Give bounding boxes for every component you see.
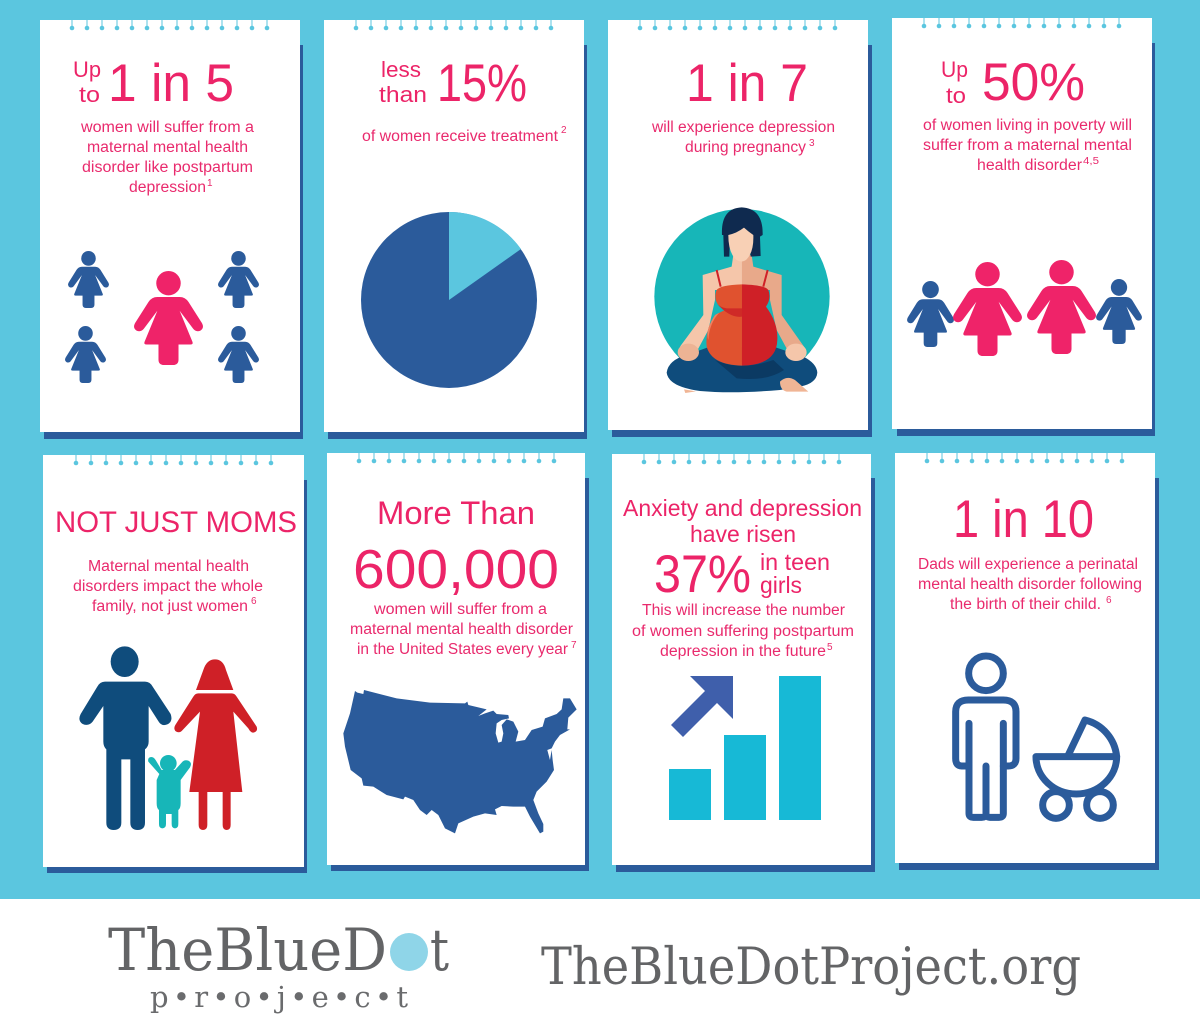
text: will experience depression bbox=[651, 119, 835, 156]
heading: less than 15%: 15% bbox=[437, 54, 527, 113]
text: women living in poverty: 4,5 bbox=[1083, 156, 1099, 167]
heading: up to 1 in 5: to bbox=[79, 82, 100, 107]
panel: more than 600,000 bbox=[327, 453, 589, 871]
panel: 1 in 7 bbox=[608, 20, 872, 437]
panel: not just moms bbox=[43, 455, 307, 873]
text: dads perinatal disorder: 6 bbox=[1106, 595, 1112, 606]
text: impact the whole family: Maternal mental health bbox=[88, 558, 249, 575]
heading: up to 1 in 5: Up bbox=[73, 57, 101, 82]
text: women will suffer bbox=[80, 119, 254, 196]
text: women will suffer: disorder like postpartum bbox=[82, 159, 253, 176]
pie chart: 15 percent bbox=[361, 212, 537, 388]
heading: anxiety and depression: have risen bbox=[690, 521, 796, 547]
icon: five women, one highlighted bbox=[65, 251, 259, 383]
icon: rising arrow bbox=[671, 676, 733, 737]
logo: the blue dot project bbox=[108, 916, 449, 1014]
heading: 1 in 7: 1 in 7 bbox=[686, 54, 808, 113]
text: impact the whole family: family, not just women bbox=[92, 598, 248, 615]
logo: the blue dot project: TheBlueD bbox=[108, 916, 387, 984]
heading: less than 15% bbox=[379, 54, 527, 113]
text: dads perinatal disorder bbox=[918, 556, 1142, 613]
bar chart: rising bars bbox=[669, 676, 821, 820]
text: women will suffer: 1 bbox=[207, 178, 213, 189]
icon: father and stroller bbox=[956, 656, 1117, 818]
heading: less than 15%: than bbox=[379, 82, 427, 107]
text: impact the whole family: 6 bbox=[251, 596, 257, 607]
panel: less than 15% bbox=[324, 20, 587, 439]
heading: less than 15%: less bbox=[381, 57, 421, 82]
logo: the blue dot project: t bbox=[430, 916, 449, 984]
text: postpartum depression in the future: This will increase the number bbox=[642, 602, 845, 619]
heading: 1 in 10: 1 in 10 bbox=[953, 490, 1094, 549]
text: of women receive treatment: 2 bbox=[561, 125, 567, 136]
icon: map of the united states bbox=[343, 690, 577, 833]
heading: anxiety and depression: girls bbox=[760, 572, 802, 598]
text: of women receive treatment: of women receive treatment bbox=[362, 128, 559, 145]
text: dads perinatal disorder: the birth of their child. bbox=[950, 596, 1101, 613]
panel: 1 in 10 dads bbox=[895, 453, 1159, 870]
heading: more than 600,000 bbox=[353, 495, 559, 600]
text: will experience depression: 3 bbox=[809, 138, 815, 149]
text: women will suffer: women will suffer from a bbox=[80, 119, 254, 136]
text: women living in poverty: of women living in poverty will bbox=[923, 117, 1132, 134]
text: women living in poverty bbox=[923, 117, 1132, 174]
heading: up to 50%: to bbox=[946, 83, 966, 108]
heading: more than 600,000: More Than bbox=[377, 495, 535, 531]
text: postpartum depression in the future: depression in the future bbox=[660, 643, 826, 660]
text: women in the united states bbox=[350, 601, 577, 658]
heading: anxiety and depression: Anxiety and depression bbox=[623, 495, 862, 521]
text: will experience depression: will experience depression bbox=[651, 119, 835, 136]
heading: up to 1 in 5: 1 in 5 bbox=[108, 54, 234, 113]
heading: up to 50%: Up bbox=[941, 57, 968, 82]
panel: anxiety and depression bbox=[612, 454, 875, 872]
panel: up to 1 in 5 women bbox=[40, 20, 303, 439]
website url: TheBlueDotProject.org bbox=[541, 938, 1081, 997]
text: postpartum depression in the future: 5 bbox=[827, 642, 833, 653]
text: women will suffer: maternal mental health bbox=[87, 139, 248, 156]
panel: up to 50% bbox=[892, 18, 1155, 436]
logo: the blue dot project: p•r•o•j•e•c•t bbox=[150, 980, 408, 1014]
text: dads perinatal disorder: mental health disorder following bbox=[918, 576, 1142, 593]
text: dads perinatal disorder: Dads will experience a perinatal bbox=[918, 556, 1138, 573]
heading: more than 600,000: 600,000 bbox=[353, 538, 559, 600]
text: will experience depression: during pregnancy bbox=[685, 139, 806, 156]
heading: anxiety and depression: in teen bbox=[760, 549, 830, 575]
text: postpartum depression in the future: of women suffering postpartum bbox=[632, 623, 854, 640]
heading: up to 50%: 50% bbox=[982, 53, 1085, 112]
text: women in the united states: women will suffer from a bbox=[373, 601, 547, 618]
heading: anxiety and depression bbox=[623, 495, 862, 604]
text: postpartum depression in the future bbox=[632, 602, 854, 660]
text: women living in poverty: health disorder bbox=[977, 157, 1082, 174]
heading: not just moms: NOT JUST MOMS bbox=[55, 506, 297, 539]
text: women in the united states: maternal mental health disorder bbox=[350, 621, 573, 638]
text: impact the whole family bbox=[73, 558, 263, 615]
icon: family bbox=[79, 646, 257, 830]
icon: pregnant woman meditating bbox=[654, 207, 830, 393]
text: impact the whole family: disorders impact the whole bbox=[73, 578, 263, 595]
text: women will suffer: depression bbox=[129, 179, 206, 196]
icon: four women bbox=[907, 260, 1142, 356]
text: women in the united states: in the United States every year bbox=[357, 641, 568, 658]
text: women in the united states: 7 bbox=[571, 640, 577, 651]
text: women living in poverty: suffer from a maternal mental bbox=[923, 137, 1132, 154]
heading: anxiety and depression: 37% bbox=[654, 545, 751, 604]
